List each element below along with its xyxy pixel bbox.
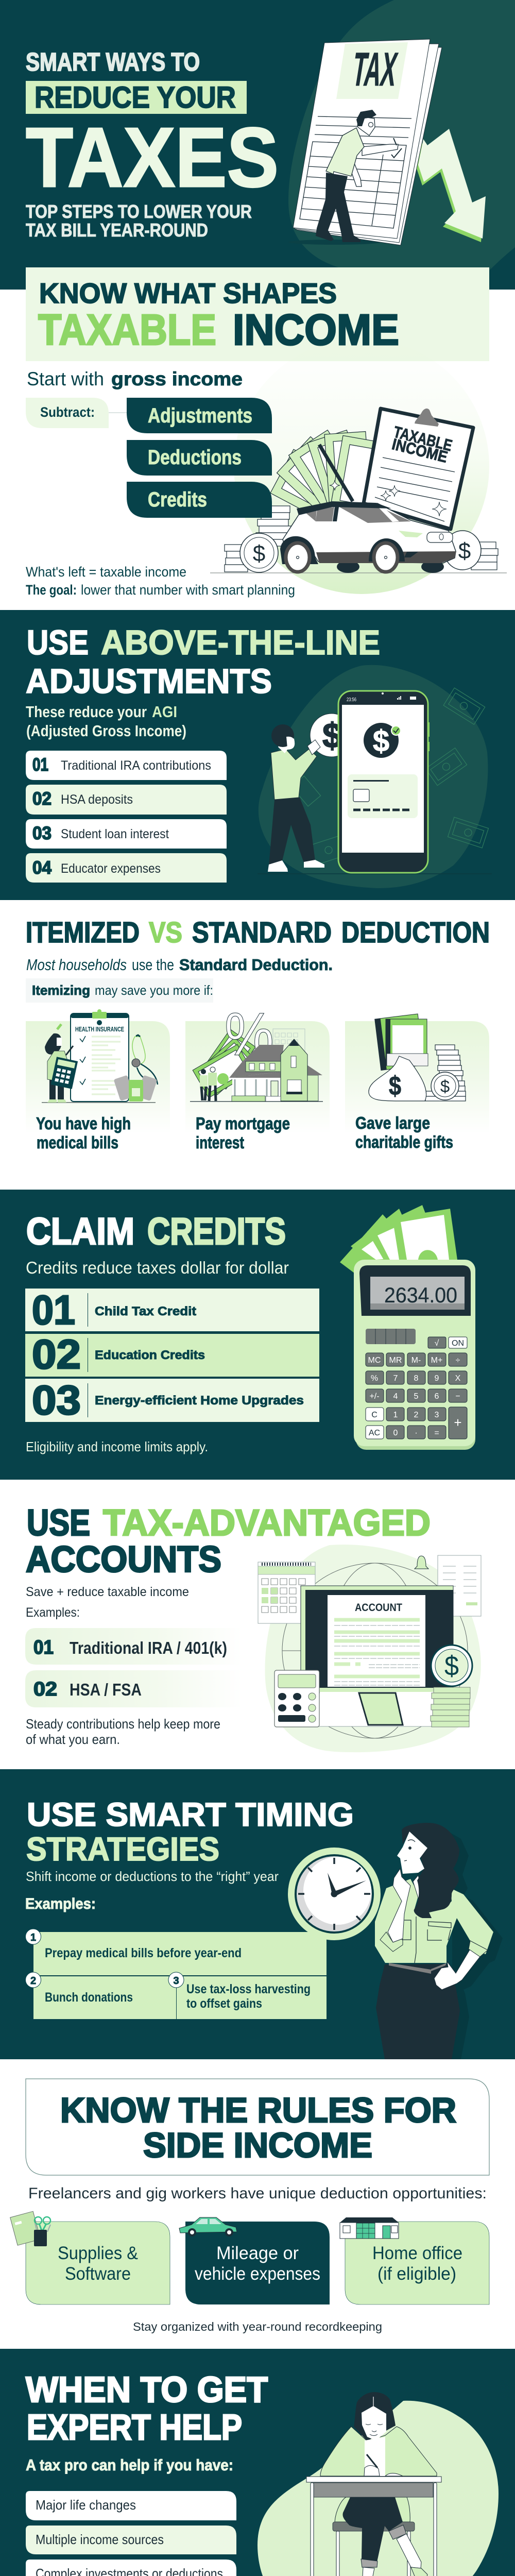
item: major life changes — [26, 2491, 236, 2520]
icon: calculator with bills: MR — [389, 1356, 402, 1365]
pill: adjustments: Adjustments — [148, 404, 252, 427]
heading — [26, 1503, 431, 1580]
text: start with gross income: gross income — [111, 368, 243, 389]
example 1 — [26, 1929, 242, 1960]
icon: calculator with bills: ON — [452, 1339, 464, 1348]
icon: health insurance clipboard — [42, 1009, 158, 1103]
heading: CREDITS — [147, 1211, 286, 1252]
heading: EXPERT HELP — [27, 2407, 242, 2447]
heading — [26, 1211, 286, 1252]
example 3 — [168, 1972, 311, 2011]
row 02: 02 — [32, 789, 52, 809]
pill: credits: Credits — [148, 488, 207, 511]
arrow: falling tax trend — [417, 129, 486, 242]
text: reduce your AGI: (Adjusted Gross Income) — [26, 722, 186, 740]
text: tax pro: A tax pro can help if you have: — [26, 2456, 233, 2474]
card: supplies and software — [10, 2211, 170, 2304]
row 02: 02 — [32, 1331, 81, 1377]
row 03: 03 — [32, 823, 52, 843]
example 3: 3 — [173, 1975, 179, 1987]
card text — [196, 1114, 290, 1152]
icon: calculator with bills: 7 — [393, 1374, 398, 1383]
text: steady contributions: of what you earn. — [26, 1732, 120, 1747]
card text: You have high — [36, 1114, 131, 1133]
icon: calculator with bills: + — [454, 1415, 462, 1430]
panel: heading: SIDE INCOME — [143, 2126, 372, 2165]
hero title — [26, 48, 279, 205]
icon: calculator with bills: ÷ — [456, 1356, 460, 1365]
icon: house — [340, 2217, 399, 2239]
card: mortgage interest — [185, 1001, 330, 1152]
hero subtitle: TAX BILL YEAR-ROUND — [26, 219, 208, 241]
card text: vehicle expenses — [195, 2264, 320, 2284]
heading: ITEMIZED — [26, 916, 140, 949]
text: most households: use the — [132, 956, 174, 974]
heading: USE — [27, 1503, 90, 1544]
row 02: HSA / FSA — [70, 1680, 142, 1699]
row 02: HSA deposits — [61, 792, 133, 807]
icon: account on laptop with globe: $ — [444, 1651, 459, 1682]
example 3: Use tax-loss harvesting — [186, 1982, 311, 1996]
section: expert help — [0, 2349, 515, 2576]
card: charitable gifts — [345, 1014, 489, 1151]
icon: woman with clock — [288, 1823, 503, 2059]
pill: credits — [127, 482, 272, 518]
hero title: SMART WAYS TO — [26, 48, 200, 76]
heading — [26, 2369, 268, 2447]
item: multiple income sources: Multiple income sources — [36, 2532, 164, 2547]
heading: WHEN TO GET — [26, 2369, 268, 2410]
text: the goal: The goal: — [26, 582, 77, 598]
heading — [38, 277, 399, 354]
card text: interest — [196, 1133, 244, 1152]
icon: calculator with bills: 8 — [414, 1374, 419, 1383]
icon: money bag and coins — [369, 1014, 466, 1101]
icon: money bag and coins: $ — [440, 1077, 450, 1096]
text: most households: Most households — [26, 956, 127, 974]
heading: ABOVE-THE-LINE — [101, 623, 380, 662]
row 02: Education Credits — [95, 1348, 205, 1362]
row 02 — [25, 1331, 319, 1377]
text: steady contributions — [26, 1716, 220, 1747]
example 3: to offset gains — [186, 1996, 262, 2011]
icon: health insurance clipboard: HEALTH INSURANCE — [75, 1026, 124, 1033]
hero title: TAXES — [26, 110, 279, 205]
item: complex investments — [26, 2560, 236, 2576]
text: most households: Standard Deduction. — [179, 956, 333, 974]
row 03 — [26, 819, 227, 849]
text: reduce your AGI — [26, 703, 186, 740]
icon: car — [179, 2217, 237, 2235]
card text: charitable gifts — [355, 1132, 453, 1151]
icon: calculator with bills: % — [371, 1374, 378, 1383]
section: tax-advantaged accounts — [25, 1503, 481, 1752]
heading — [26, 916, 490, 949]
icon: calculator with bills: 6 — [435, 1392, 439, 1401]
text: credits reduce taxes: Credits reduce taxes dollar for dollar — [26, 1258, 289, 1277]
heading: ADJUSTMENTS — [26, 662, 272, 701]
example boxes — [26, 1929, 327, 2019]
text: save and reduce: Examples: — [26, 1605, 80, 1620]
card text — [195, 2243, 320, 2284]
card text: Supplies & — [58, 2243, 138, 2263]
icon: calculator with bills: 9 — [435, 1374, 439, 1383]
icon: calculator with bills: − — [455, 1392, 460, 1401]
row 01: Traditional IRA / 401(k) — [70, 1638, 227, 1657]
icon: calculator with bills: · — [415, 1429, 418, 1437]
icon: woman writing at desk — [258, 2392, 499, 2576]
icon: car, money and taxable income clipboard: INCOME — [390, 435, 450, 466]
icon: car, money and taxable income clipboard: $ — [458, 538, 471, 564]
icon: account on laptop with globe — [258, 1555, 481, 1738]
icon: person with coin and phone: 23:56 — [347, 697, 356, 703]
heading: KNOW WHAT SHAPES — [39, 277, 337, 309]
row 02 — [25, 1670, 242, 1707]
hero subtitle: TOP STEPS TO LOWER YOUR — [26, 201, 252, 222]
heading: INCOME — [233, 306, 399, 354]
icon: calculator with bills: 4 — [393, 1392, 398, 1401]
icon: calculator with bills: 2 — [414, 1411, 419, 1419]
section: claim credits — [0, 1190, 515, 1480]
card text: Mileage or — [216, 2243, 299, 2263]
pill: deductions: Deductions — [148, 446, 242, 469]
pill: deductions — [127, 440, 272, 476]
card text: Home office — [372, 2243, 462, 2263]
row 01: 01 — [33, 1637, 54, 1658]
card: medical bills — [26, 1009, 170, 1152]
card text — [58, 2243, 138, 2284]
label: subtract — [26, 398, 127, 428]
example 2 — [26, 1972, 133, 2005]
heading: DEDUCTION — [341, 916, 490, 949]
row 04: 04 — [32, 858, 52, 878]
heading: STANDARD — [192, 916, 332, 949]
row 02 — [26, 785, 227, 815]
text: reduce your AGI: AGI — [152, 703, 177, 721]
icon: car, money and taxable income clipboard — [210, 338, 507, 594]
icon: calculator with bills — [340, 1205, 475, 1450]
example 2: 2 — [30, 1975, 36, 1987]
row 01 — [26, 751, 227, 780]
heading: CLAIM — [26, 1211, 134, 1252]
panel: heading — [26, 2079, 489, 2175]
text: eligibility: Eligibility and income limits apply. — [26, 1439, 208, 1454]
text: the goal — [26, 564, 295, 598]
section: side income — [10, 2079, 489, 2333]
panel: know what shapes taxable income — [26, 267, 489, 361]
card text — [36, 1114, 131, 1152]
icon: calculator with bills: 5 — [414, 1392, 419, 1401]
text: examples: Examples: — [25, 1895, 96, 1912]
heading: VS — [149, 916, 182, 949]
card: home office — [340, 2217, 489, 2304]
text: most households — [26, 956, 333, 974]
icon: calculator with bills: M- — [411, 1356, 421, 1365]
row 03: 03 — [32, 1377, 81, 1423]
heading: STRATEGIES — [26, 1831, 219, 1868]
text: the goal: lower that number with smart planning — [81, 582, 295, 598]
icon: calculator with bills: 0 — [393, 1429, 398, 1437]
heading: ACCOUNTS — [26, 1539, 221, 1580]
text: stay organized: Stay organized with year-round recordkeeping — [133, 2320, 382, 2333]
icon: calculator with bills: M+ — [431, 1356, 442, 1365]
card text: medical bills — [37, 1133, 118, 1152]
icon: calculator with bills: C — [371, 1411, 377, 1419]
card text: Gave large — [355, 1113, 430, 1132]
item: multiple income sources — [26, 2526, 236, 2554]
text: steady contributions: Steady contributions help keep more — [26, 1716, 220, 1732]
row 01 — [25, 1287, 319, 1333]
hero subtitle — [26, 201, 252, 241]
tag: itemizing: Itemizing — [32, 982, 90, 998]
example 2: Bunch donations — [45, 1990, 133, 2005]
example 1: 1 — [30, 1932, 36, 1943]
row 03: Energy-efficient Home Upgrades — [95, 1394, 304, 1408]
icon: calculator with bills: = — [434, 1429, 439, 1437]
card text — [372, 2243, 462, 2284]
heading: TAXABLE — [38, 306, 216, 354]
card text: Pay mortgage — [196, 1114, 290, 1133]
row 03: Student loan interest — [61, 827, 169, 841]
hero title: REDUCE YOUR — [35, 81, 236, 114]
section: itemized vs standard deduction — [26, 916, 490, 1152]
icon: calculator with bills: 1 — [393, 1411, 398, 1419]
text: the goal: What's left = taxable income — [26, 564, 186, 580]
row 04: Educator expenses — [61, 861, 161, 876]
text: save and reduce: Save + reduce taxable income — [26, 1585, 189, 1599]
icon: calculator with bills: 3 — [435, 1411, 439, 1419]
card: mileage — [179, 2217, 330, 2304]
icon: person with coin and phone: $ — [322, 716, 342, 755]
section: above-the-line adjustments — [0, 610, 515, 900]
row 02: 02 — [33, 1679, 57, 1700]
text: freelancers: Freelancers and gig workers have unique deduction opportunities: — [28, 2185, 487, 2202]
icon: man checking tax form: TAX — [349, 43, 401, 96]
heading — [26, 1796, 354, 1868]
row 01: 01 — [32, 755, 48, 775]
tag: itemizing: may save you more if: — [95, 982, 213, 998]
icon: house with percent sign: % — [225, 1001, 274, 1069]
label: subtract: Subtract: — [40, 404, 95, 420]
icon: house with percent sign — [190, 1001, 323, 1101]
icon: notebook, scissors and cup — [10, 2211, 50, 2246]
row 01: 01 — [32, 1287, 75, 1333]
icon: car, money and taxable income clipboard: TAXABLE — [392, 423, 454, 455]
panel: heading: KNOW THE RULES FOR — [60, 2091, 456, 2130]
card text: Software — [65, 2264, 131, 2284]
icon: calculator with bills: X — [455, 1374, 461, 1383]
row 01 — [25, 1628, 242, 1665]
icon: calculator with bills: +/- — [369, 1392, 380, 1401]
icon: calculator with bills: 2634.00 — [384, 1283, 457, 1307]
icon: calculator with bills: √ — [435, 1339, 439, 1348]
tag: itemizing — [26, 978, 213, 1003]
row 01: Child Tax Credit — [95, 1304, 196, 1318]
text: shift income: Shift income or deductions to the “right” year — [26, 1869, 279, 1884]
example 1: Prepay medical bills before year-end — [45, 1946, 242, 1960]
row 03 — [25, 1377, 319, 1423]
section: hero — [0, 0, 515, 290]
heading: USE — [27, 623, 89, 662]
row 01: Traditional IRA contributions — [61, 758, 211, 773]
text: start with gross income — [27, 368, 243, 389]
section: smart timing strategies — [0, 1769, 515, 2059]
card text: (if eligible) — [377, 2264, 456, 2284]
text: start with gross income: Start with — [27, 368, 104, 389]
icon: car, money and taxable income clipboard: $ — [253, 541, 265, 566]
icon: calculator with bills: MC — [368, 1356, 381, 1365]
heading: USE SMART TIMING — [27, 1796, 354, 1833]
icon: man checking tax form — [288, 39, 442, 245]
icon: person with coin and phone — [258, 688, 492, 874]
card text — [355, 1113, 453, 1151]
icon: money bag and coins: $ — [389, 1071, 401, 1101]
pill: adjustments — [127, 398, 272, 433]
text: reduce your AGI: These reduce your — [26, 703, 147, 721]
item: major life changes: Major life changes — [36, 2497, 136, 2513]
text: save and reduce — [26, 1585, 189, 1620]
heading: TAX-ADVANTAGED — [103, 1503, 431, 1544]
icon: person with coin and phone: $ — [373, 724, 389, 758]
heading — [26, 623, 380, 701]
icon: calculator with bills: AC — [369, 1429, 380, 1437]
row 04 — [26, 853, 227, 883]
icon: account on laptop with globe: ACCOUNT — [355, 1602, 402, 1614]
